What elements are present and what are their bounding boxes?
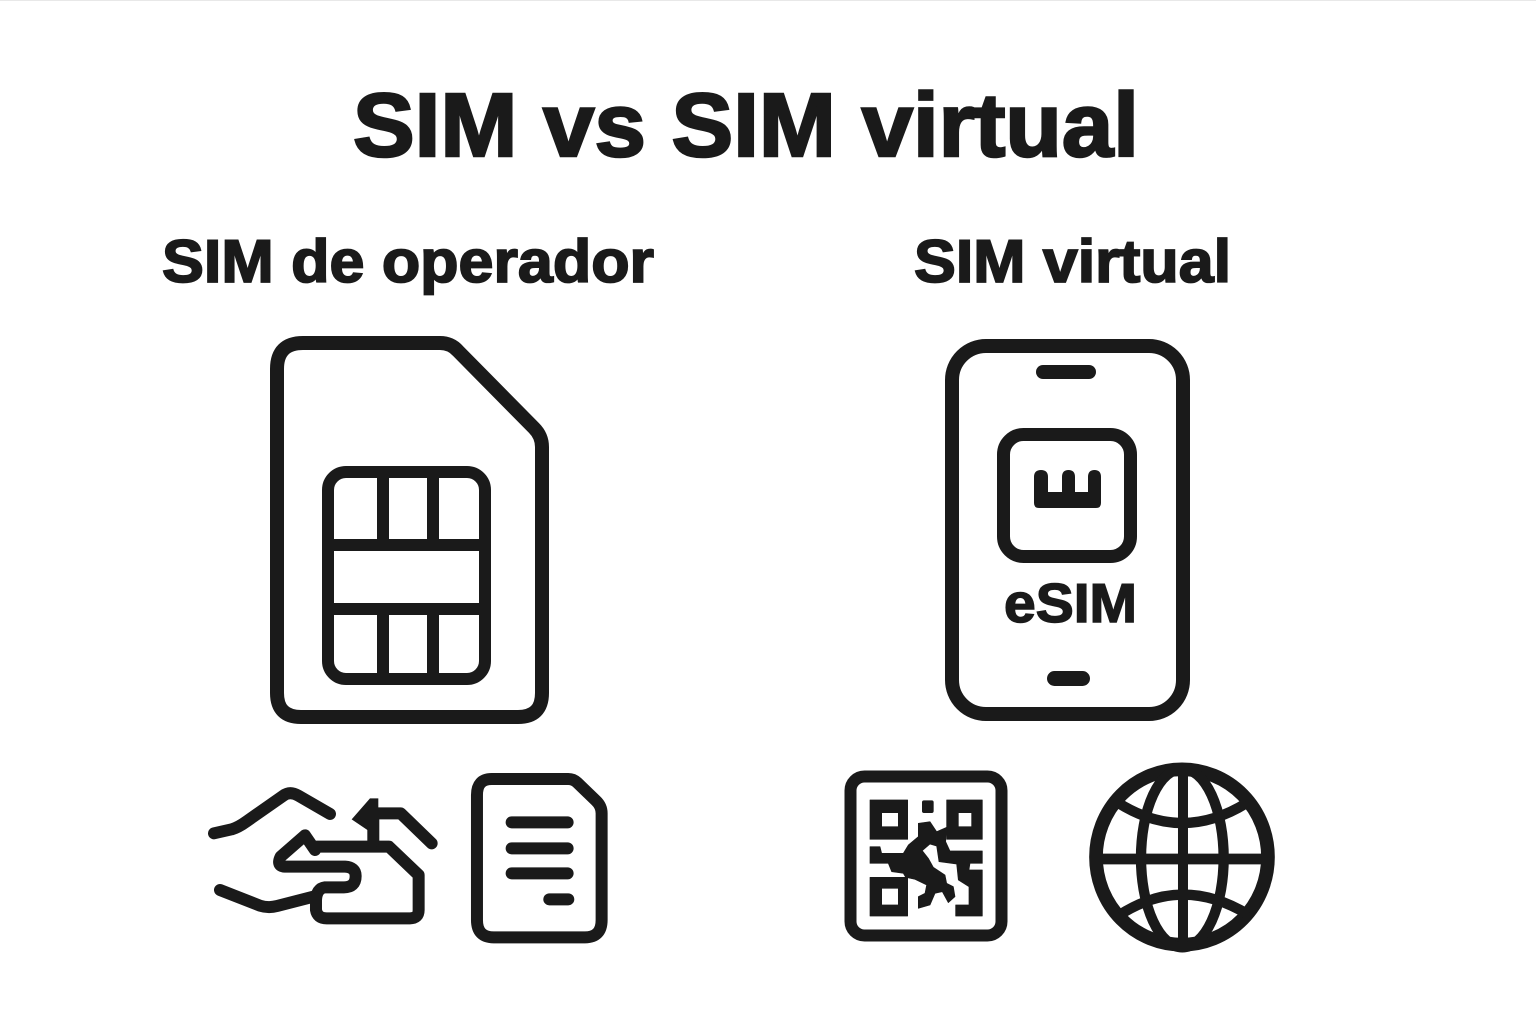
heading: SIM virtual: SIM virtual [914, 228, 1231, 295]
icon: QR code [850, 776, 1002, 936]
icon: globe [1096, 768, 1268, 947]
SIM chip [328, 472, 485, 679]
QR pattern [870, 800, 982, 916]
icon: physical SIM card [277, 343, 542, 717]
phone home button [1047, 671, 1090, 686]
icon: hand handing over a SIM [214, 793, 432, 918]
phone speaker [1036, 365, 1096, 379]
eSIM chip glyph [1034, 470, 1101, 508]
eSIM chip frame [1004, 434, 1130, 556]
title: SIM vs SIM virtual [353, 76, 1139, 176]
eSIM label: eSIM [1004, 572, 1137, 634]
phone body [952, 346, 1183, 714]
icon: smartphone with eSIM [952, 346, 1183, 714]
SIM card outline [277, 343, 542, 717]
QR frame [850, 776, 1002, 936]
icon: document [477, 779, 602, 937]
heading: SIM de operador: SIM de operador [162, 228, 654, 295]
